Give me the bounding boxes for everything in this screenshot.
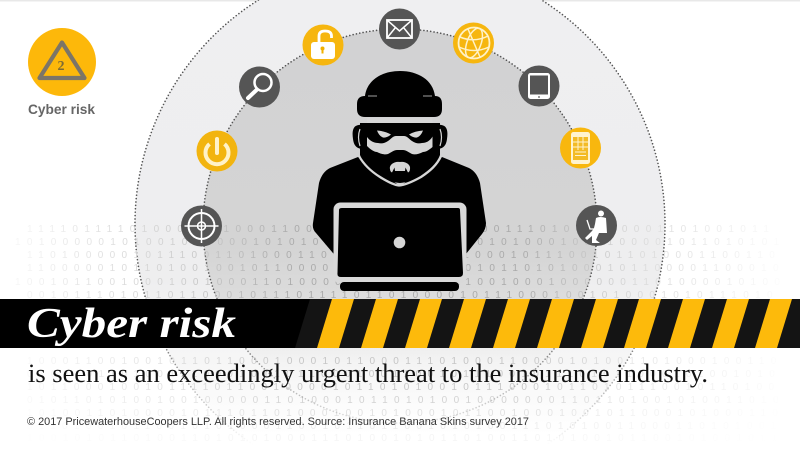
hacker figure [313,71,486,291]
source footer: © 2017 PricewaterhouseCoopers LLP. All rights reserved. Source: Insurance Banana Skins survey 2017 [27,416,529,428]
binary pattern above banner: 1100000101101001001011000001000010000010110101000101100001100010 [27,263,785,274]
icon: tablet [518,66,560,106]
icon: target [181,206,222,246]
binary pattern below banner: 1001010110100110101010001110100101011010011010100101100101001011 [27,433,783,444]
hat crease [368,95,432,97]
binary pattern above banner: 0010111010110110001011101111011010000101110001001010001010111010 [27,290,779,301]
binary pattern above banner: 1111011110100001110001100110011001110100011101001110001101001011 [27,224,775,235]
binary pattern above banner: 10010110010001001000110100000101000101100100010000001101000010100 [15,277,786,288]
hacker ears [353,125,447,149]
hacker hat [357,71,442,117]
binary pattern below banner: 1010011010000101110110100010010100010110010001001011000101000110 [27,408,784,419]
laptop lid outline [334,202,466,284]
badge number: 2 [58,59,64,74]
warning triangle [40,42,84,78]
badge: cyber risk [28,28,96,117]
binary pattern below banner [27,356,785,444]
binary pattern below banner: 1000110010010110110001000101100011101000110000101001101000100110 [27,356,783,367]
icon: magnifier [239,66,280,108]
lower face gap [367,136,432,154]
head outline [359,156,441,186]
banner charcoal section [295,299,800,348]
ear gap lines [358,129,442,146]
icon: globe [453,22,494,64]
binary pattern above banner: 1101000001011100110100011000001000110100010111001011010001100110 [27,250,781,261]
icon: power button [196,130,238,172]
banner background [0,299,800,348]
icon: envelope [379,8,420,50]
mouth [390,162,410,172]
banner heading: Cyber risk [27,301,236,347]
hacker body [313,157,486,259]
binary pattern below banner: 1011000100101111011001000010110101001011100010110101110010110100 [27,382,780,393]
laptop lid [337,208,463,277]
icon: smartphone [560,128,601,168]
badge label: Cyber risk [28,102,95,117]
binary pattern below banner: 0100101101001110001011011000100110010111001011101011000101001010 [27,369,781,380]
laptop base [340,282,459,291]
icon: person with laptop [576,205,617,246]
binary pattern below banner: 0101101010010010000011010001011010100100000001101101001010011010 [27,395,785,406]
hazard stripes [317,299,792,348]
icon: open padlock [302,24,344,66]
laptop logo dot [394,237,405,248]
badge circle [28,28,96,96]
binary pattern below banner: 0110100101100101010001100101101100101010011101010011000110101001 [27,421,783,432]
subtitle: is seen as an exceedingly urgent threat to the insurance industry. [28,359,708,388]
hacker face and beard [360,123,440,183]
headband gap [367,118,432,123]
binary pattern above banner [15,224,786,301]
eyes [377,130,423,138]
binary pattern above banner: 10100000101001000000101010110100011011001010001001100001011010101 [15,237,786,248]
warning banner [0,299,800,348]
background: concentric circles [135,0,665,449]
